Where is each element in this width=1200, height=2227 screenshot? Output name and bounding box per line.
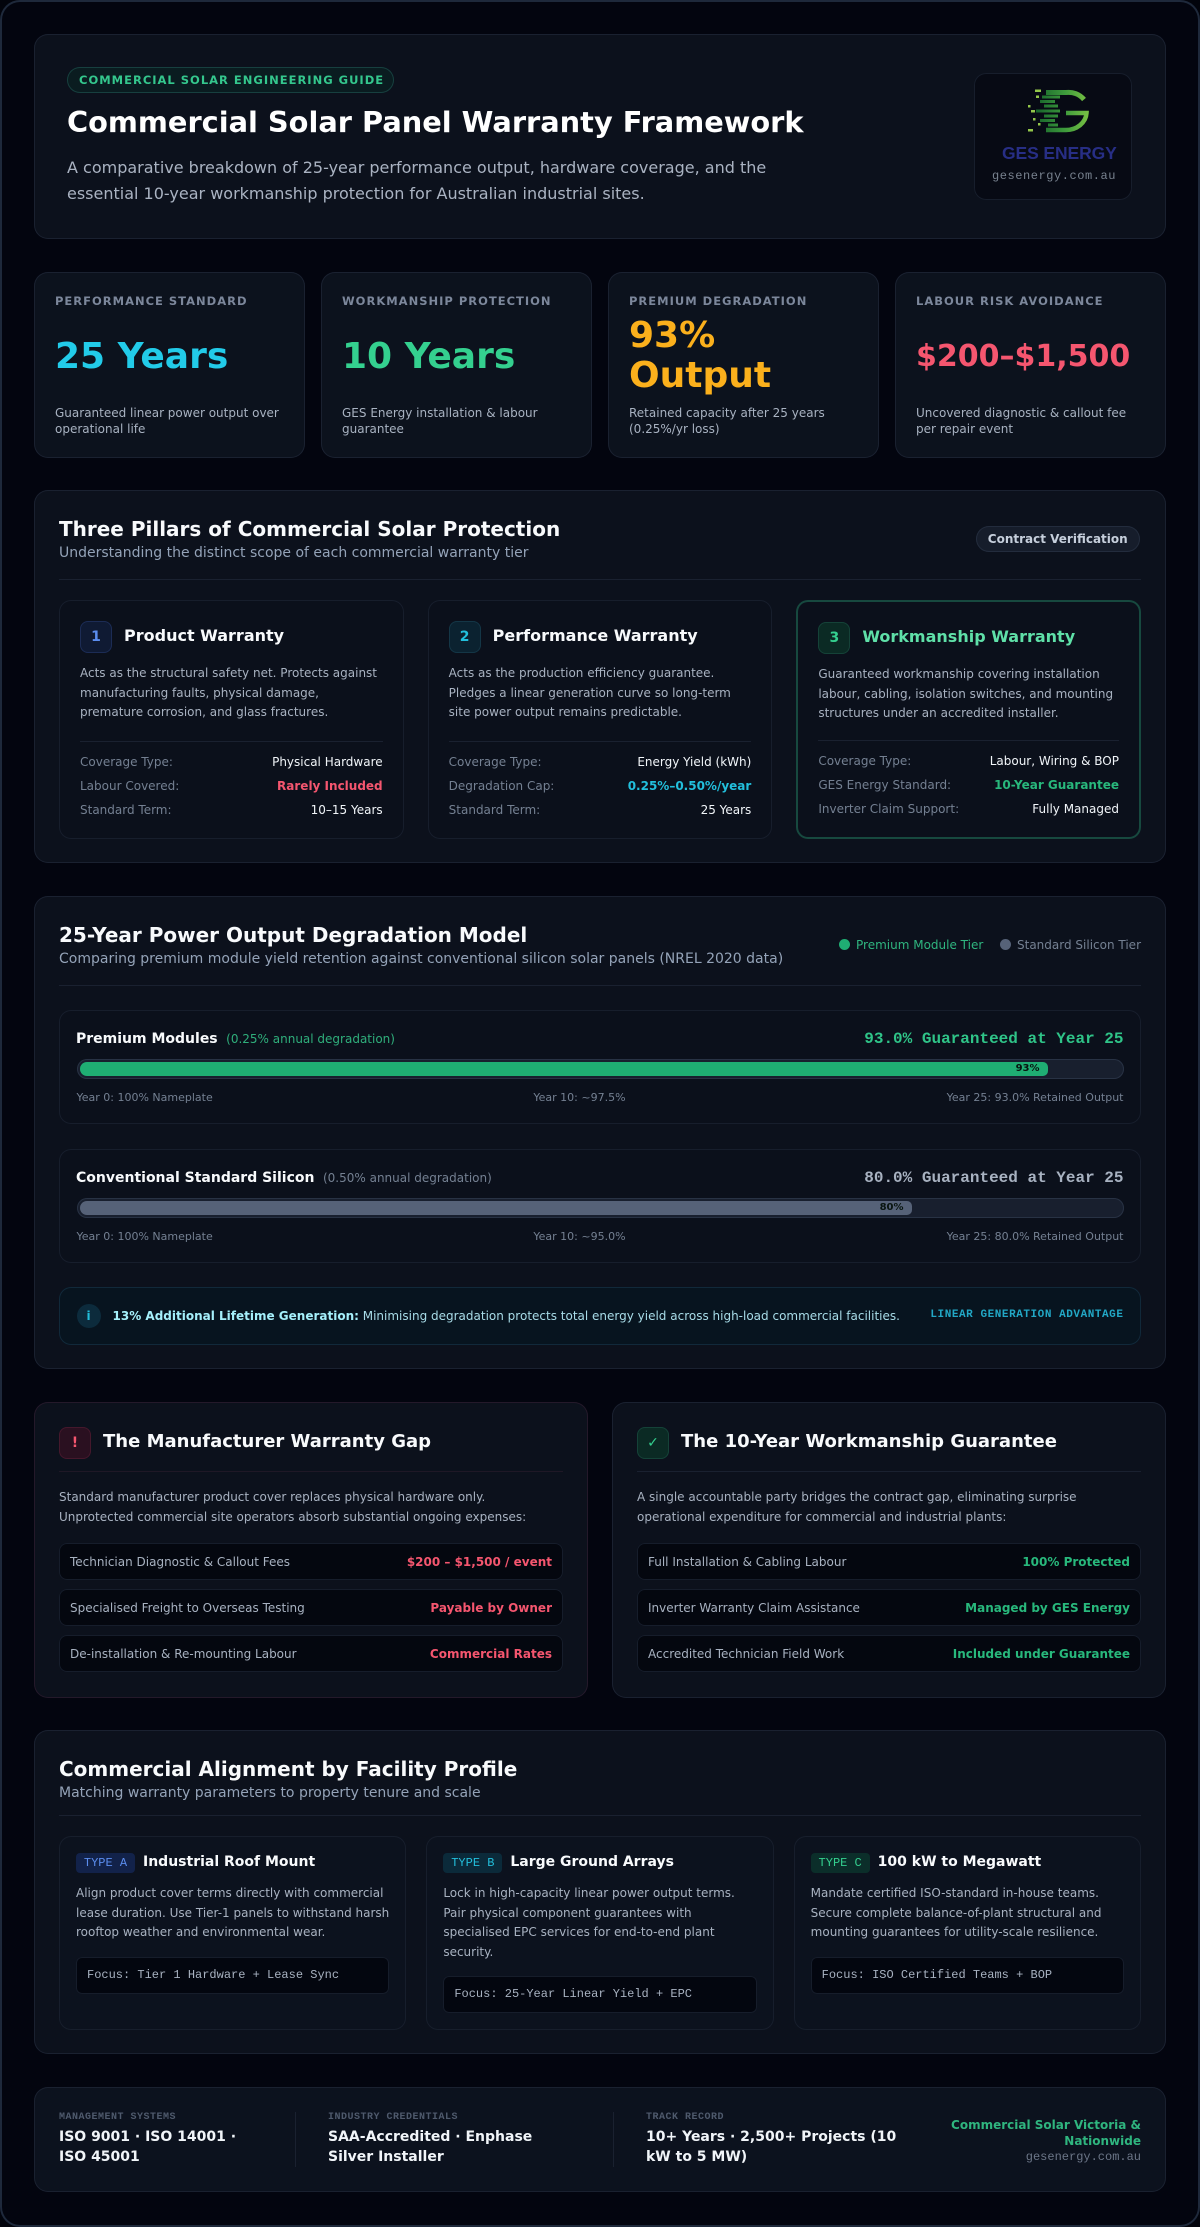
section heading: 25-Year Power Output Degradation Model [59,923,527,947]
logo card [974,73,1132,200]
stat card: performance standard: operational life [55,422,145,436]
pillar card: performance warranty: Pledges a linear generation curve so long-term [449,686,731,700]
coverage rows: Physical Hardware [272,755,383,769]
focus box [443,1976,757,2013]
coverage rows [449,755,752,817]
panel: manufacturer warranty gap: The Manufacturer Warranty Gap [103,1431,431,1452]
number badge 1: 1 [91,629,101,645]
footer contact [951,2118,1141,2164]
coverage rows: Labour Covered: [80,779,179,793]
cost row [59,1543,563,1580]
number badge 1 [80,621,112,653]
cost row [59,1635,563,1672]
title: Commercial Solar Panel Warranty Framework [67,105,804,139]
section subtitle: Comparing premium module yield retention against conventional silicon solar panels (NREL 2020 data) [59,951,783,967]
panel: footer credentials [34,2087,1166,2192]
facility card: type A: Align product cover terms directly with commercial [76,1886,383,1900]
coverage rows: Coverage Type: [818,754,911,768]
panel: three pillars [34,490,1166,863]
benefit row [637,1543,1141,1580]
facility card: type C: mounting guarantees for utility-scale resilience. [811,1925,1098,1939]
focus box [76,1957,389,1994]
logo wordmark: GES ENERGY [1002,143,1117,163]
panel: workmanship guarantee: The 10-Year Workmanship Guarantee [681,1431,1057,1452]
number badge 2 [449,621,481,653]
chart legend: Premium Module Tier [856,938,983,952]
benefit row: 100% Protected [1022,1554,1130,1568]
stat card: workmanship protection [321,272,592,458]
section subtitle: Understanding the distinct scope of each commercial warranty tier [59,545,528,561]
cost row: $200 – $1,500 / event [407,1554,552,1568]
benefit row [637,1589,1141,1626]
facility card: type C: TYPE C [819,1856,862,1870]
coverage rows: Rarely Included [277,779,383,793]
icon: warning: ! [72,1435,78,1451]
number badge 3: 3 [829,630,839,646]
pillar card: workmanship warranty [796,600,1141,839]
icon: check [637,1427,669,1459]
icon: warning [59,1427,91,1459]
number badge 2: 2 [460,629,470,645]
stat card: labour risk avoidance: per repair event [916,422,1013,436]
coverage rows: Fully Managed [1032,802,1119,816]
credential: management systems: ISO 9001 · ISO 14001 · [59,2129,236,2145]
footer contact: gesenergy.com.au [1026,2150,1141,2164]
progress card: conventional silicon [59,1149,1141,1263]
cost row: Technician Diagnostic & Callout Fees [70,1554,290,1568]
facility card: type B: Lock in high-capacity linear power output terms. [443,1886,735,1900]
benefit row: Accredited Technician Field Work [648,1646,844,1660]
benefit row: Inverter Warranty Claim Assistance [648,1600,860,1614]
credential: industry credentials: Silver Installer [328,2149,444,2165]
credential: industry credentials [328,2112,532,2165]
panel: workmanship guarantee: operational expenditure for commercial and industrial plants: [637,1510,1006,1524]
coverage rows: 0.25%–0.50%/year [628,779,751,793]
section subtitle: Matching warranty parameters to property tenure and scale [59,1785,481,1801]
bar: 93 percent: 93% [1016,1063,1040,1074]
facility card: type C [794,1836,1141,2030]
progress card: conventional silicon: Year 10: ~95.0% [533,1230,626,1243]
facility card: type A [59,1836,406,2030]
stat card: labour risk avoidance: Uncovered diagnostic & callout fee [916,406,1126,420]
pillar card: workmanship warranty: structures under an accredited installer. [818,706,1059,720]
facility card: type C: Secure complete balance-of-plant structural and [811,1906,1101,1920]
callout: lifetime generation [59,1287,1141,1345]
progress card: premium modules: Year 25: 93.0% Retained Output [947,1091,1124,1104]
pill: contract verification [976,526,1140,552]
panel: workmanship guarantee: A single accountable party bridges the contract gap, eliminating surprise [637,1490,1077,1504]
pillar card: performance warranty: site power output remains predictable. [449,705,682,719]
coverage rows [818,754,1119,816]
stat card: labour risk avoidance [895,272,1166,458]
progress card: conventional silicon: Year 0: 100% Nameplate [76,1230,213,1243]
panel: workmanship guarantee [612,1402,1166,1698]
coverage rows: Standard Term: [80,803,172,817]
chart legend: Standard Silicon Tier [1017,938,1141,952]
facility card: type B: TYPE B [451,1856,494,1870]
header description: essential 10-year workmanship protection for Australian industrial sites. [67,184,645,203]
progress card: conventional silicon: Year 25: 80.0% Retained Output [947,1230,1124,1243]
facility card: type A: Industrial Roof Mount [143,1854,315,1870]
pill: contract verification: Contract Verification [988,532,1128,546]
pillar card: performance warranty: Acts as the production efficiency guarantee. [449,666,714,680]
stat card: premium degradation: (0.25%/yr loss) [629,422,720,436]
credential: management systems: ISO 45001 [59,2149,140,2165]
focus box [811,1957,1124,1994]
header description [67,158,766,203]
header description: A comparative breakdown of 25-year performance output, hardware coverage, and the [67,158,766,177]
progress card: premium modules: Year 0: 100% Nameplate [76,1091,213,1104]
coverage rows: 25 Years [701,803,751,817]
stat card: workmanship protection: WORKMANSHIP PROTECTION [342,294,552,308]
pillar card: workmanship warranty: Guaranteed workmanship covering installation [818,667,1100,681]
credential: management systems [59,2112,236,2165]
stat card: labour risk avoidance: LABOUR RISK AVOIDANCE [916,294,1104,308]
stat card: labour risk avoidance: $200–$1,500 [916,339,1130,374]
facility card: type C: 100 kW to Megawatt [878,1854,1041,1870]
logo url: gesenergy.com.au [992,169,1116,183]
cost row: Commercial Rates [430,1646,552,1660]
credential: industry credentials: SAA-Accredited · Enphase [328,2129,532,2145]
facility card: type B [426,1836,774,2030]
credential: management systems: MANAGEMENT SYSTEMS [59,2112,176,2123]
progress card: premium modules [59,1010,1141,1124]
coverage rows: GES Energy Standard: [818,778,951,792]
footer contact: Nationwide [1064,2134,1141,2148]
stat card: workmanship protection: GES Energy installation & labour [342,406,538,420]
benefit row: Full Installation & Cabling Labour [648,1554,846,1568]
icon: check: ✓ [647,1435,659,1451]
panel: manufacturer warranty gap [34,1402,588,1698]
benefit row [637,1635,1141,1672]
credential: track record: 10+ Years · 2,500+ Projects (10 [646,2129,896,2145]
progress card: premium modules: Year 10: ~97.5% [533,1091,626,1104]
facility card: type C: Mandate certified ISO-standard in-house teams. [811,1886,1099,1900]
cost row [59,1589,563,1626]
focus box: Focus: Tier 1 Hardware + Lease Sync [87,1968,339,1982]
progress card: conventional silicon: 80.0% Guaranteed at Year 25 [864,1169,1124,1187]
icon: info: i [86,1309,91,1323]
stat card: performance standard: Guaranteed linear power output over [55,406,279,420]
pillar card: workmanship warranty: labour, cabling, isolation switches, and mounting [818,686,1113,700]
section heading: Commercial Alignment by Facility Profile [59,1757,517,1781]
badge: guide label [67,67,394,93]
footer contact: Commercial Solar Victoria & [951,2118,1141,2132]
coverage rows [80,755,383,817]
facility card: type B: Pair physical component guarantees with [443,1906,692,1920]
coverage rows: 10-Year Guarantee [994,778,1119,792]
pillar card: product warranty: premature corrosion, and glass fractures. [80,705,328,719]
stat card: premium degradation: 93% [629,315,715,356]
bar: 80 percent: 80% [880,1202,904,1213]
chart legend [839,938,1142,952]
coverage rows: Degradation Cap: [449,779,554,793]
pillar card: performance warranty: Performance Warranty [493,626,698,645]
number badge 3 [818,622,850,654]
facility card: type A: TYPE A [84,1856,127,1870]
stat card: premium degradation: Retained capacity after 25 years [629,406,825,420]
stat card: premium degradation: PREMIUM DEGRADATION [629,294,807,308]
pillar card: product warranty: Acts as the structural safety net. Protects against [80,666,377,680]
callout: lifetime generation: LINEAR GENERATION ADVANTAGE [930,1309,1124,1321]
coverage rows: Labour, Wiring & BOP [990,754,1119,768]
focus box: Focus: ISO Certified Teams + BOP [822,1968,1052,1982]
credential: industry credentials: INDUSTRY CREDENTIALS [328,2112,458,2123]
panel: header [34,34,1166,239]
coverage rows: Inverter Claim Support: [818,802,959,816]
credential: track record: TRACK RECORD [646,2112,724,2123]
bar: 80 percent [76,1198,1124,1218]
coverage rows: Coverage Type: [449,755,542,769]
coverage rows: Standard Term: [449,803,540,817]
benefit row: Managed by GES Energy [965,1600,1130,1614]
stat card: performance standard: PERFORMANCE STANDARD [55,294,248,308]
facility card: type A: lease duration. Use Tier-1 panels to withstand harsh [76,1906,389,1920]
icon: info [76,1304,100,1328]
bar: 93 percent [76,1059,1124,1079]
stat card: workmanship protection: guarantee [342,422,404,436]
coverage rows: 10–15 Years [311,803,383,817]
facility card: type A: rooftop weather and environmental wear. [76,1925,325,1939]
pillar card: product warranty: manufacturing faults, physical damage, [80,686,319,700]
credential: track record [646,2112,896,2165]
cost row: Specialised Freight to Overseas Testing [70,1600,305,1614]
panel: manufacturer warranty gap: Unprotected commercial site operators absorb substantial ongoing expenses: [59,1510,526,1524]
coverage rows: Energy Yield (kWh) [637,755,751,769]
progress card: conventional silicon: Conventional Standard Silicon (0.50% annual degradation) [76,1170,492,1186]
credential: track record: kW to 5 MW) [646,2149,747,2165]
panel: degradation model [34,896,1166,1369]
pillar card: product warranty: Product Warranty [124,626,284,645]
stat card: performance standard: 25 Years [55,336,228,377]
facility card: type B: Large Ground Arrays [510,1854,674,1870]
badge: guide label: COMMERCIAL SOLAR ENGINEERING GUIDE [79,73,384,87]
pillar card: performance warranty [428,600,772,839]
panel: manufacturer warranty gap: Standard manufacturer product cover replaces physical hardware only. [59,1490,485,1504]
coverage rows: Coverage Type: [80,755,173,769]
progress card: premium modules: Premium Modules (0.25% annual degradation) [76,1031,395,1047]
focus box: Focus: 25-Year Linear Yield + EPC [454,1987,692,2001]
stat card: premium degradation [608,272,879,458]
facility card: type B: security. [443,1944,493,1958]
panel: facility alignment [34,1730,1166,2054]
stat card: workmanship protection: 10 Years [342,336,515,377]
facility card: type B: specialised EPC services for end-to-end plant [443,1925,715,1939]
section heading: Three Pillars of Commercial Solar Protection [59,517,560,541]
pillar card: workmanship warranty: Workmanship Warranty [862,627,1075,646]
cost row: De-installation & Re-mounting Labour [70,1646,297,1660]
stat card: premium degradation: Output [629,355,771,396]
cost row: Payable by Owner [430,1600,552,1614]
progress card: premium modules: 93.0% Guaranteed at Year 25 [864,1030,1124,1048]
benefit row: Included under Guarantee [953,1646,1130,1660]
callout: lifetime generation: 13% Additional Lifetime Generation: Minimising degradation protects total energy yield across high-load commercial facilities. [112,1309,900,1323]
stat card: performance standard [34,272,305,458]
icon: GES Energy G logo [1028,90,1089,132]
pillar card: product warranty [59,600,404,839]
